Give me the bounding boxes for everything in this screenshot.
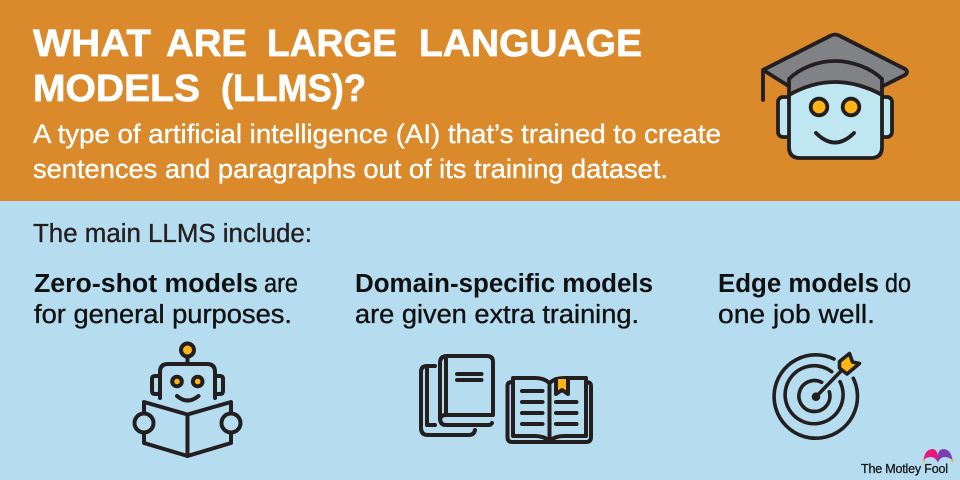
text block: domain-specific models	[355, 270, 653, 329]
text block: domain-specific models: are given extra training.	[355, 301, 639, 329]
text block: zero-shot models: Zero-shot models	[34, 270, 258, 298]
icon: closed and open books	[421, 356, 591, 442]
text block: zero-shot models: for general purposes.	[34, 301, 292, 329]
icon: robot reading a book	[134, 344, 240, 456]
intro text: The main LLMS include:	[33, 220, 312, 248]
title: WHAT	[33, 23, 151, 65]
title: (LLMS)?	[221, 68, 366, 110]
text block: edge models: one job well.	[718, 301, 875, 329]
logo jester hat	[922, 449, 954, 462]
subtitle: A type of artificial intelligence (AI) that’s trained to create	[33, 119, 721, 149]
panel: header band	[0, 0, 960, 201]
text block: zero-shot models	[34, 270, 298, 329]
subtitle	[33, 119, 721, 184]
title: LARGE	[267, 23, 397, 65]
logo wordmark: The Motley Fool	[861, 462, 948, 476]
logo: The Motley Fool	[861, 449, 954, 476]
title: MODELS	[33, 68, 200, 110]
title: LANGUAGE	[419, 23, 642, 65]
text block: domain-specific models: Domain-specific models	[355, 270, 653, 298]
text block: zero-shot models: are	[264, 270, 298, 298]
title: ARE	[166, 23, 247, 65]
title	[33, 23, 642, 110]
text block: edge models: Edge models	[718, 270, 879, 298]
subtitle: sentences and paragraphs out of its training dataset.	[33, 154, 668, 184]
icon: target with arrow	[774, 354, 860, 438]
icon: robot with graduation cap	[763, 34, 907, 158]
text block: edge models	[718, 270, 911, 329]
text block: edge models: do	[885, 270, 911, 298]
panel: lower section	[0, 201, 960, 480]
